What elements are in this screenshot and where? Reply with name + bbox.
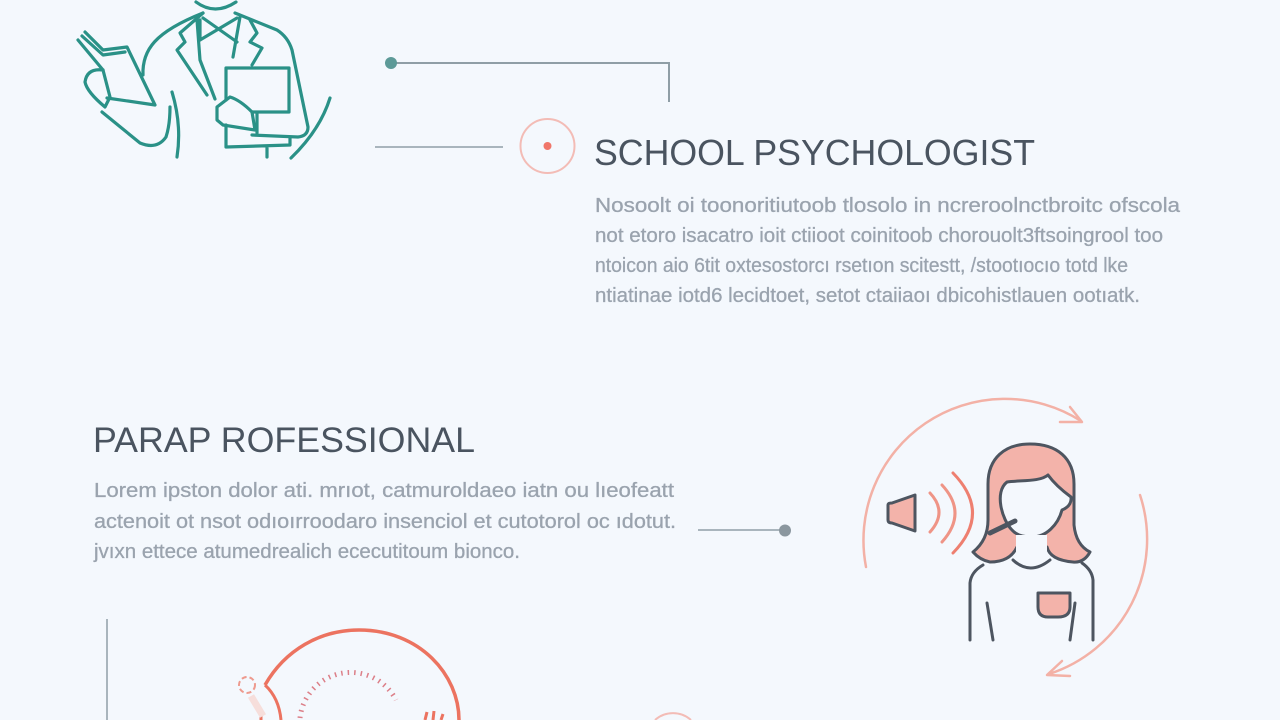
text block: school psychologist description: ntiatinae iotd6 lecidtoet, setot ctaiiaoı dbicohistlauen ootıatk. [595, 285, 1140, 307]
icon: speaker [888, 495, 915, 531]
icon: sound waves [930, 473, 972, 553]
text block: school psychologist description: not etoro isacatro ioit ctiioot coinitoob chorouolt3ftsoingrool too [595, 225, 1163, 247]
text block: paraprofessional description: jvıxn ettece atumedrealich ececutitoum bionco. [93, 541, 520, 563]
text block: school psychologist description: ntoicon aio 6tit oxtesostorcı rsetıon scitestt, /stootıocıo totd lke [595, 255, 1128, 277]
hand [990, 521, 1015, 533]
divider line: third section [106, 619, 108, 720]
hair [973, 444, 1090, 562]
figure: woman [970, 444, 1093, 640]
marker: school psychologist [520, 119, 574, 173]
connector: elbow line to school psychologist [385, 57, 669, 102]
pocket [1038, 593, 1070, 617]
heading: paraprofessional: PARAP ROFESSIONAL [93, 421, 475, 460]
connector: paraprofessional line and dot [698, 524, 791, 536]
icon: school psychologist holding a book and clipboard [78, 2, 330, 158]
text block: paraprofessional description: actenoit ot nsot odıoırroodaro insenciol et cutotorol oc ıdotut. [94, 511, 676, 533]
connector: line to marker [375, 146, 503, 148]
text block: school psychologist description: Nosoolt oi toonoritiutoob tlosolo in ncreroolnctbroitc ofscola [595, 195, 1181, 217]
collar and shoulders [1013, 560, 1050, 568]
neck [1016, 535, 1047, 563]
heading: school psychologist: SCHOOL PSYCHOLOGIST [594, 132, 1035, 173]
marker: next section, cropped at the bottom edge [655, 713, 691, 720]
text block: paraprofessional description [93, 480, 676, 563]
icon: paraprofessional with speaker and circular arrows [863, 399, 1147, 676]
face [1000, 475, 1071, 537]
arrow: upper circular arrow [863, 399, 1082, 567]
text block: paraprofessional description: Lorem ipston dolor ati. mrıot, catmuroldaeo iatn ou lıeofeatt [94, 480, 674, 502]
icon: partial head outline with dashed arc [239, 630, 459, 720]
arrow: lower circular arrow [1047, 495, 1147, 676]
text block: school psychologist description [595, 195, 1181, 307]
